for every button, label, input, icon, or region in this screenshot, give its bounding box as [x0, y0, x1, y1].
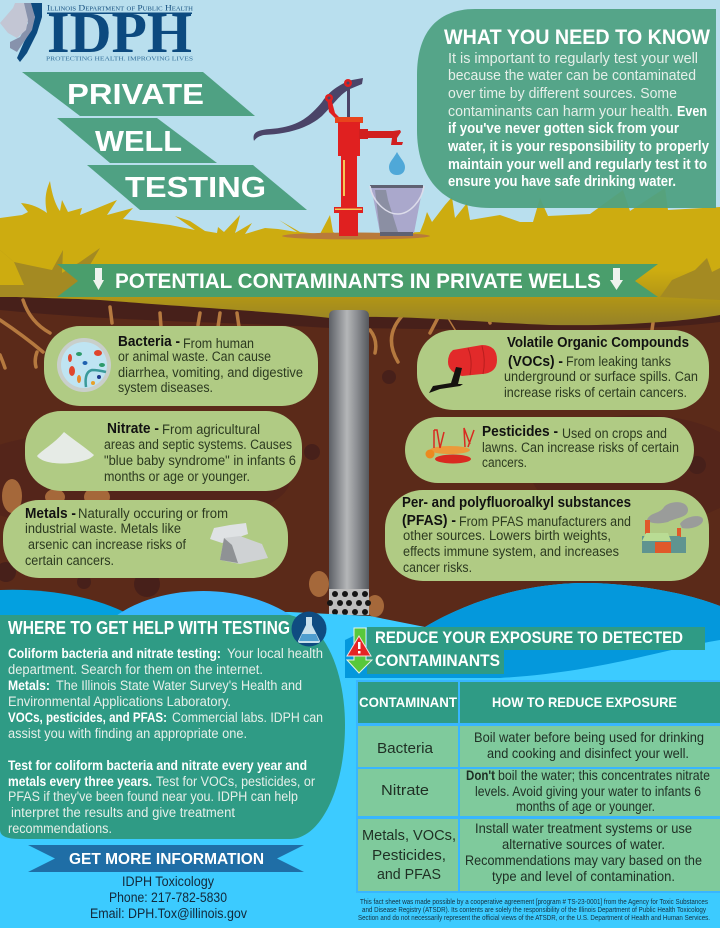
row: metals, VOCs, pesticides, PFAS: and PFAS: [377, 866, 441, 883]
card: VOCs: Volatile Organic Compounds: [507, 335, 689, 351]
card: VOCs: From leaking tanks: [566, 354, 671, 369]
text: system diseases.: [118, 380, 213, 395]
card: pesticides: [405, 417, 694, 483]
card: PFAS: cancer risks.: [403, 560, 472, 575]
card: pesticides: Pesticides -: [482, 424, 558, 440]
row: metals, VOCs, pesticides, PFAS: type and level of contamination.: [492, 868, 675, 884]
banner: get more information: [28, 845, 304, 872]
banner: potential contaminants: POTENTIAL CONTAMINANTS IN PRIVATE WELLS: [115, 270, 601, 293]
row: metals, VOCs, pesticides, PFAS: alternative sources of water.: [502, 836, 665, 852]
title: Private Well Testing: TESTING: [125, 172, 266, 204]
footer: funding disclaimer: [358, 899, 710, 922]
card: nitrate: areas and septic systems. Causes: [104, 437, 292, 452]
card: metals: industrial waste. Metals like: [25, 521, 181, 536]
card: pesticides: Used on crops and: [562, 426, 667, 441]
logo: Illinois Department of Public Health: PROTECTING HEALTH. IMPROVING LIVES: [46, 56, 193, 62]
icon: dead insect: [426, 428, 474, 464]
card: metals: [3, 500, 288, 578]
table: how to reduce exposure: [356, 680, 720, 893]
row: nitrate: Don't: [466, 767, 495, 783]
background: soil: [0, 290, 720, 630]
heading: reduce your exposure: REDUCE YOUR EXPOSURE TO DETECTED: [375, 629, 683, 647]
card: nitrate: [25, 411, 302, 491]
row: nitrate: months of age or younger.: [516, 798, 655, 814]
body text: ensure you have safe drinking water.: [448, 174, 676, 190]
title: Private Well Testing: WELL: [95, 126, 182, 158]
row: metals, VOCs, pesticides, PFAS: Recommendations may vary based on the: [465, 852, 702, 868]
text: Bacteria -: [118, 334, 180, 350]
logo: Illinois Department of Public Health: Illinois Department of Public Health: [47, 2, 194, 12]
card: PFAS: effects immune system, and increases: [403, 544, 619, 559]
text: or animal waste. Can cause: [118, 349, 271, 364]
background: sky: [0, 0, 720, 300]
title: Private Well Testing: [22, 72, 307, 210]
card: PFAS: Per- and polyfluoroalkyl substances: [402, 495, 631, 511]
banner: potential contaminants: [57, 264, 658, 297]
heading: WHAT YOU NEED TO KNOW: [444, 26, 710, 49]
icon: flask: [292, 612, 326, 646]
heading: WHERE TO GET HELP WITH TESTING: [8, 618, 290, 638]
arrow: right down: [610, 268, 623, 290]
body text: Test for VOCs, pesticides, or: [156, 774, 315, 789]
row: metals, VOCs, pesticides, PFAS: [358, 819, 720, 891]
body text: interpret the results and give treatment: [11, 805, 235, 820]
body text: because the water can be contaminated: [448, 68, 696, 84]
card: metals: arsenic can increase risks of: [28, 537, 186, 552]
body text: Even: [677, 104, 707, 120]
card: metals: certain cancers.: [25, 553, 114, 568]
card: metals: Naturally occuring or from: [78, 506, 228, 521]
row: nitrate: [358, 767, 720, 816]
table header: CONTAMINANT: [359, 694, 457, 710]
table header: [358, 682, 720, 723]
contact information: [90, 874, 247, 921]
icon: metal rocks: [210, 523, 268, 564]
body text: if you've never gotten sick from your: [448, 121, 679, 137]
background: lower water: [0, 583, 720, 928]
arrow: left down: [93, 268, 104, 290]
illustration: red hand water pump: [254, 78, 430, 240]
icon: white powder: [37, 432, 94, 463]
row: bacteria: Bacteria: [377, 740, 434, 757]
card: PFAS: [385, 490, 709, 581]
illustration: well pipe: [327, 310, 371, 615]
icon: Illinois map: [0, 3, 42, 62]
banner: get more information: GET MORE INFORMATION: [69, 851, 264, 868]
card: PFAS: other sources. Lowers birth weights,: [403, 528, 611, 543]
body text: Test for coliform bacteria and nitrate every year and: [8, 758, 307, 773]
row: metals, VOCs, pesticides, PFAS: Pesticides,: [372, 847, 446, 864]
body text: It is important to regularly test your well: [448, 51, 698, 67]
body text: VOCs, pesticides, and PFAS:: [8, 710, 167, 725]
body text: contaminants can harm your health.: [448, 104, 673, 120]
card: VOCs: underground or surface spills. Can: [504, 369, 698, 384]
body text: The Illinois State Water Survey's Health and: [56, 678, 302, 693]
row: bacteria: and cooking and disinfect your well.: [487, 745, 689, 761]
row: nitrate: Nitrate: [381, 782, 429, 799]
panel: what you need to know: [417, 9, 716, 208]
card: PFAS: From PFAS manufacturers and: [459, 514, 631, 529]
icon: water drop: [389, 152, 405, 175]
card: VOCs: [417, 330, 709, 410]
icon: leaking barrel: [429, 345, 497, 393]
card: nitrate: From agricultural: [162, 422, 260, 437]
row: bacteria: [358, 726, 720, 767]
card: bacteria: [44, 326, 318, 406]
heading: reduce your exposure: CONTAMINANTS: [375, 652, 500, 670]
card: pesticides: lawns. Can increase risks of certain: [482, 440, 679, 455]
body text: metals every three years.: [8, 774, 152, 789]
body text: department. Search for them on the internet.: [8, 662, 263, 677]
logo: Illinois Department of Public Health: IDPH: [47, 0, 192, 65]
body text: Metals:: [8, 678, 50, 693]
card: nitrate: months or age or younger.: [104, 469, 250, 484]
body text: [447, 51, 709, 190]
heading: reduce your exposure: [347, 627, 705, 674]
text: [118, 334, 303, 395]
card: PFAS: (PFAS) -: [402, 513, 456, 529]
row: metals, VOCs, pesticides, PFAS: Install water treatment systems or use: [475, 820, 692, 836]
body text: recommendations.: [8, 821, 112, 836]
body text: Coliform bacteria and nitrate testing:: [8, 646, 221, 661]
contact information: Phone: 217-782-5830: [109, 890, 227, 905]
row: metals, VOCs, pesticides, PFAS: Metals, VOCs,: [362, 827, 456, 844]
card: nitrate: Nitrate -: [107, 421, 159, 437]
title: Private Well Testing: PRIVATE: [67, 79, 204, 111]
contact information: IDPH Toxicology: [122, 874, 214, 889]
card: metals: Metals -: [25, 506, 76, 522]
card: VOCs: (VOCs) -: [508, 354, 563, 370]
text: diarrhea, vomiting, and digestive: [118, 365, 303, 380]
body text: Commercial labs. IDPH can: [172, 710, 323, 725]
icon: petri dish: [57, 338, 111, 392]
row: bacteria: Boil water before being used for drinking: [474, 729, 704, 745]
text: From human: [183, 336, 254, 351]
body text: Environmental Applications Laboratory.: [8, 694, 231, 709]
table header: HOW TO REDUCE EXPOSURE: [492, 694, 677, 710]
body text: Your local health: [227, 646, 323, 661]
icon: bucket: [370, 185, 424, 236]
panel: where to get help with testing: [0, 612, 345, 839]
card: nitrate: "blue baby syndrome" in infants 6: [104, 453, 296, 468]
body text: [8, 646, 323, 836]
icon: warning triangle and down arrow: [347, 628, 372, 673]
background: grass field: [0, 181, 720, 325]
contact information: Email: DPH.Tox@illinois.gov: [90, 906, 247, 921]
body text: PFAS if they've been found near you. IDPH can help: [8, 789, 298, 804]
card: VOCs: increase risks of certain cancers.: [504, 385, 687, 400]
body text: over time by different sources. Some: [448, 86, 677, 102]
icon: factory: [642, 502, 703, 553]
body text: assist you with finding an appropriate one.: [8, 726, 247, 741]
card: pesticides: cancers.: [482, 455, 527, 470]
